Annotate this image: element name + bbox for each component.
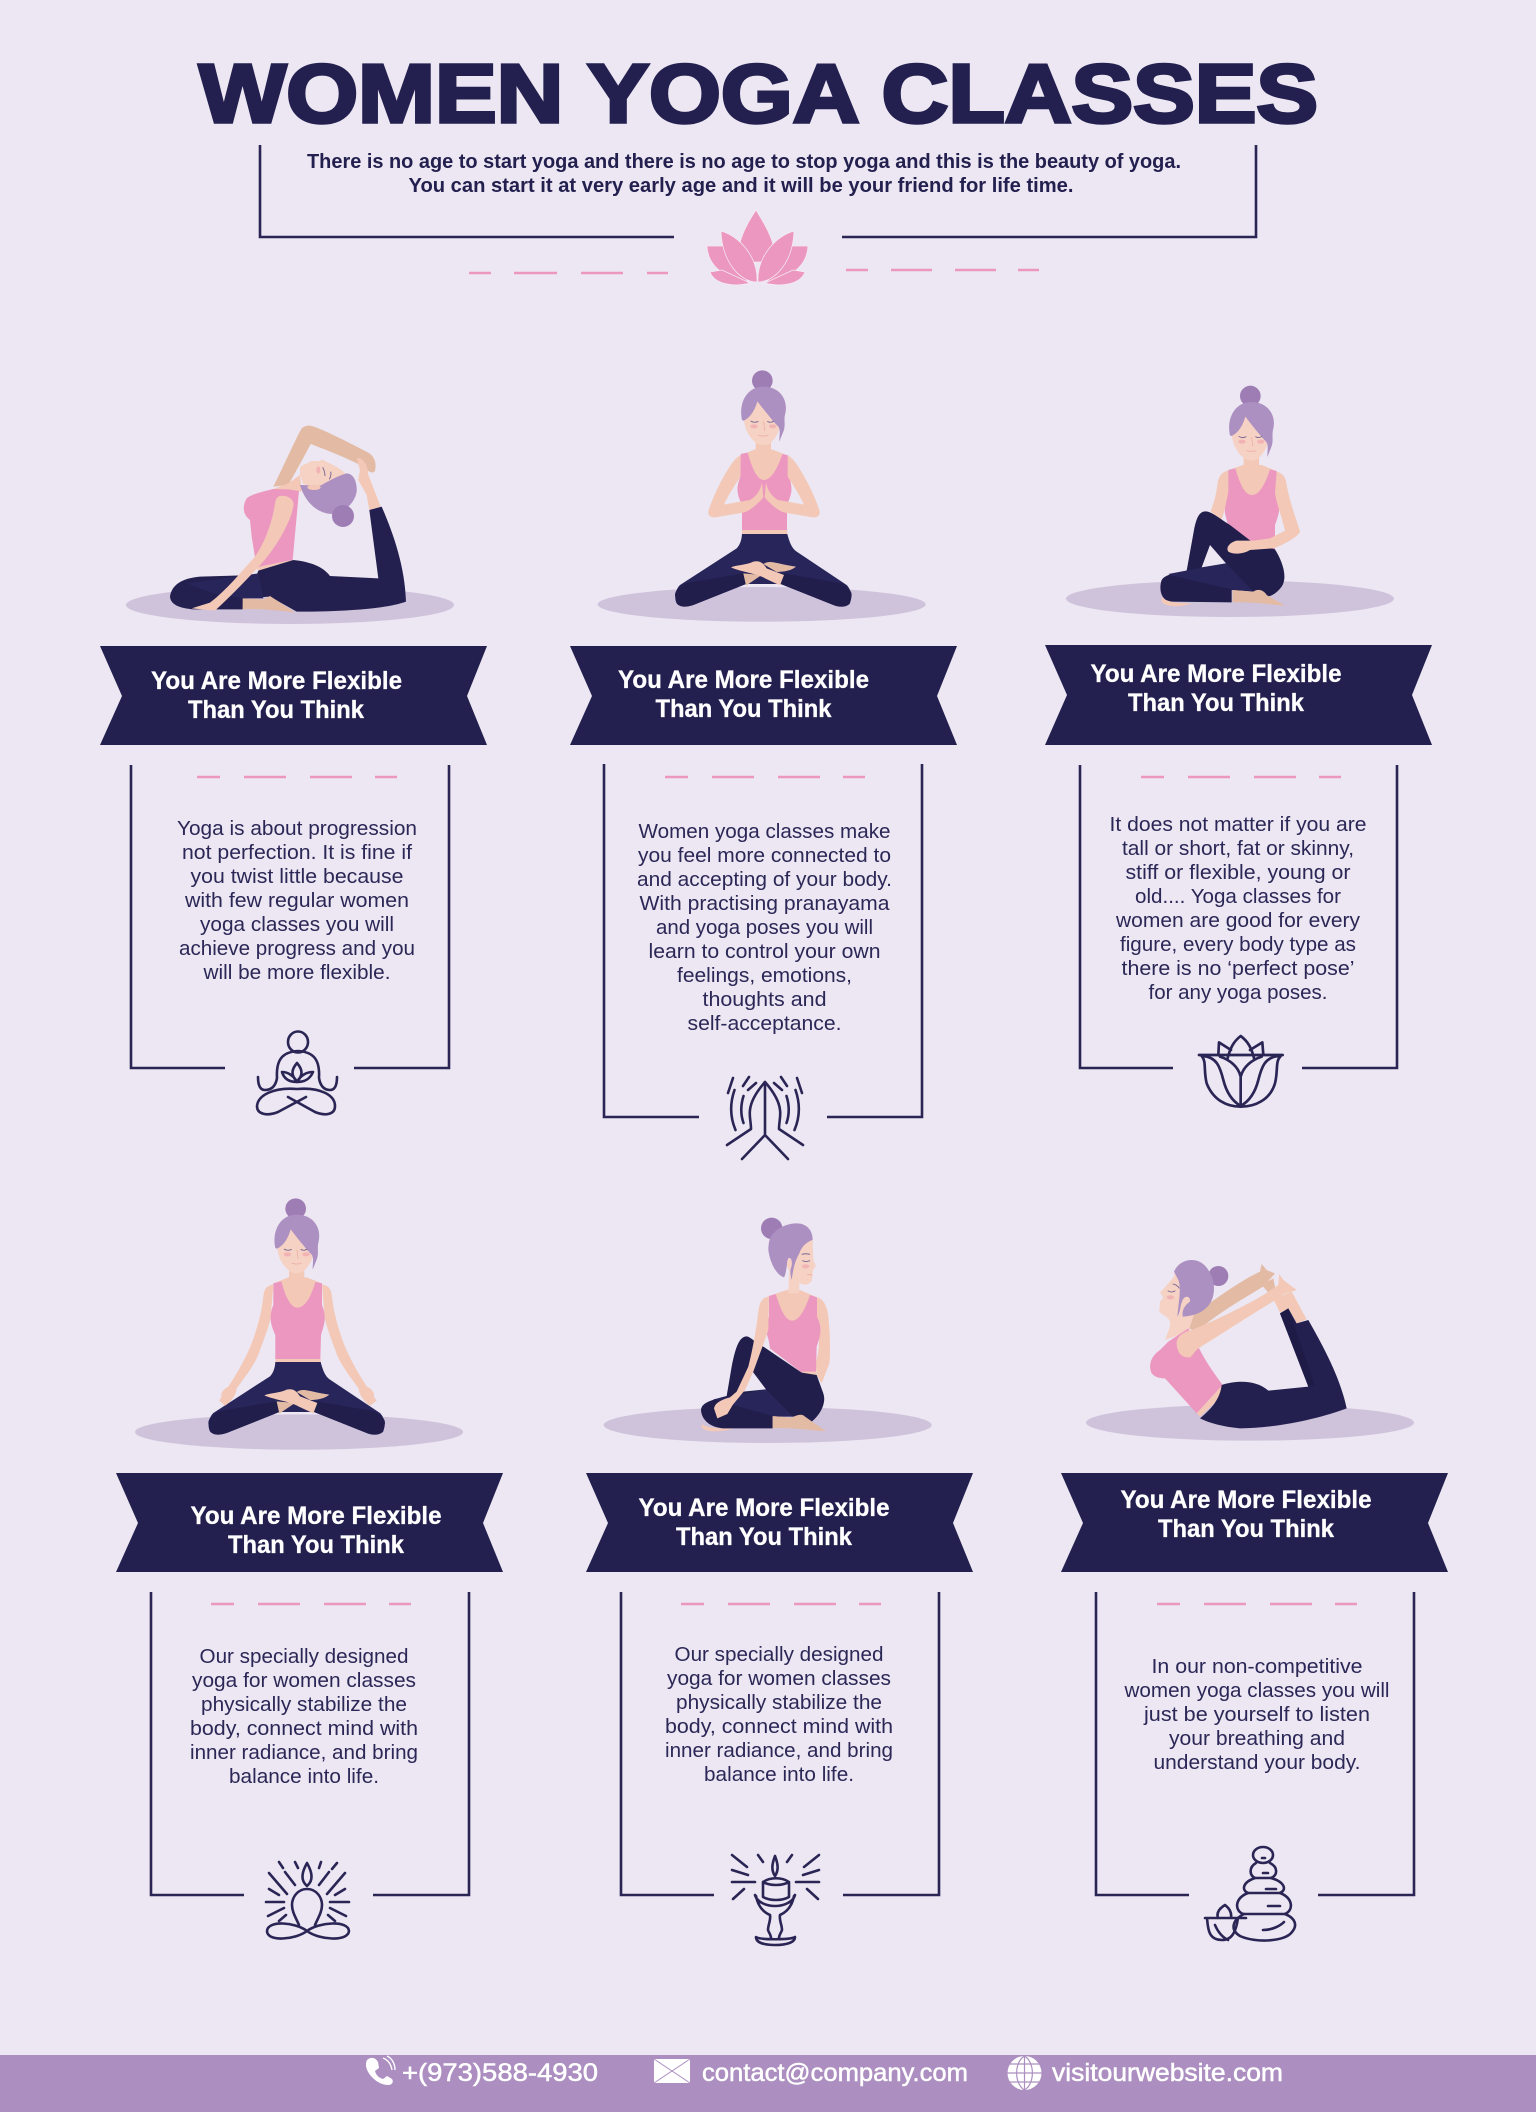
icon: radiant meditation — [266, 1862, 349, 1939]
body text: for any yoga poses. — [1148, 981, 1328, 1004]
decorative pink dashes — [1141, 776, 1341, 778]
icon: stacked stones with lotus — [1205, 1847, 1295, 1941]
figure: seated twist, hand on knee — [1066, 386, 1394, 617]
body text: physically stabilize the — [201, 1693, 407, 1716]
body text: yoga for women classes — [192, 1669, 416, 1692]
body text: not perfection. It is fine if — [182, 841, 412, 864]
decorative pink dashes right — [846, 269, 1039, 271]
banner — [116, 1473, 503, 1572]
text frame — [1080, 765, 1397, 1068]
banner: Than You Think — [1128, 689, 1304, 717]
banner: Than You Think — [1158, 1515, 1334, 1543]
body text: achieve progress and you — [179, 937, 415, 960]
text frame — [621, 1592, 939, 1895]
header intro text: There is no age to start yoga and there is no age to stop yoga and this is the beauty of yoga. — [307, 150, 1181, 173]
title: WOMEN YOGA CLASSES — [199, 47, 1318, 140]
text frame — [1096, 1592, 1414, 1895]
header intro text — [307, 150, 1181, 197]
body text: Yoga is about progression — [177, 817, 417, 840]
body text: thoughts and — [702, 988, 826, 1011]
decorative pink dashes — [681, 1603, 881, 1605]
body text: there is no ‘perfect pose’ — [1122, 957, 1354, 980]
icon: meditating figure with lotus — [257, 1032, 337, 1114]
banner: Than You Think — [188, 696, 364, 724]
banner: Than You Think — [656, 695, 832, 723]
panel: pose 1 — [100, 426, 487, 1114]
body text: stiff or flexible, young or — [1126, 861, 1351, 884]
header intro text: You can start it at very early age and it will be your friend for life time. — [408, 174, 1074, 197]
panel: pose 4 — [116, 1198, 503, 1939]
banner: You Are More Flexible — [1090, 660, 1342, 688]
banner: You Are More Flexible — [151, 667, 402, 695]
banner: You Are More Flexible — [1120, 1486, 1372, 1514]
body text: understand your body. — [1154, 1751, 1360, 1774]
text frame — [604, 764, 922, 1117]
text frame — [131, 765, 449, 1068]
body text — [177, 817, 417, 984]
decorative pink dashes — [665, 776, 865, 778]
body text: balance into life. — [229, 1765, 379, 1788]
body text: with few regular women — [184, 889, 409, 912]
body text: and accepting of your body. — [637, 868, 892, 891]
decorative pink dashes — [211, 1603, 411, 1605]
icon: praying hands — [727, 1077, 803, 1159]
body text: you feel more connected to — [638, 844, 891, 867]
banner — [1061, 1473, 1448, 1572]
body text: old.... Yoga classes for — [1135, 885, 1341, 908]
banner: Than You Think — [228, 1531, 404, 1559]
icon: envelope — [654, 2059, 690, 2083]
banner: You Are More Flexible — [190, 1502, 442, 1530]
body text: With practising pranayama — [640, 892, 890, 915]
banner — [570, 646, 957, 745]
body text: balance into life. — [704, 1763, 854, 1786]
icon: globe — [1008, 2056, 1042, 2090]
body text: physically stabilize the — [676, 1691, 882, 1714]
body text — [1110, 813, 1366, 1004]
figure: lotus pose, arms down — [135, 1198, 463, 1450]
decorative pink dashes — [1157, 1603, 1357, 1605]
body text: just be yourself to listen — [1143, 1703, 1370, 1726]
phone number: +(973)588-4930 — [402, 2059, 598, 2087]
panel: pose 6 — [1061, 1260, 1448, 1941]
figure: bow pose — [1086, 1260, 1414, 1441]
figure: king pigeon pose — [126, 426, 454, 624]
body text: yoga for women classes — [667, 1667, 891, 1690]
banner: You Are More Flexible — [618, 666, 869, 694]
body text: inner radiance, and bring — [665, 1739, 893, 1762]
body text: feelings, emotions, — [677, 964, 852, 987]
body text: tall or short, fat or skinny, — [1122, 837, 1354, 860]
body text — [637, 820, 892, 1035]
body text: learn to control your own — [648, 940, 880, 963]
icon: pink lotus — [707, 210, 808, 285]
banner — [1045, 645, 1432, 745]
panel: pose 3 — [1045, 386, 1432, 1107]
panel: pose 2 — [570, 370, 957, 1159]
figure: lotus pose with praying hands — [598, 370, 926, 622]
text frame — [151, 1592, 469, 1895]
body text: yoga classes you will — [200, 913, 394, 936]
body text: Our specially designed — [674, 1643, 884, 1666]
body text: you twist little because — [190, 865, 404, 888]
body text: your breathing and — [1169, 1727, 1345, 1750]
body text — [665, 1643, 893, 1786]
body text: body, connect mind with — [190, 1717, 418, 1740]
body text: will be more flexible. — [202, 961, 390, 984]
icon: lotus outline — [1199, 1036, 1283, 1107]
body text: self-acceptance. — [688, 1012, 842, 1035]
decorative pink dashes — [197, 776, 397, 778]
body text: body, connect mind with — [665, 1715, 893, 1738]
body text — [1123, 1655, 1390, 1774]
body text: inner radiance, and bring — [190, 1741, 418, 1764]
body text: women yoga classes you will — [1123, 1679, 1390, 1702]
email address: contact@company.com — [702, 2059, 968, 2087]
panel: pose 5 — [586, 1218, 973, 1945]
footer contact bar — [0, 2055, 1536, 2112]
icon: phone — [366, 2056, 395, 2085]
body text: Our specially designed — [200, 1645, 408, 1668]
website: visitourwebsite.com — [1052, 2059, 1283, 2087]
body text: figure, every body type as — [1120, 933, 1356, 956]
banner — [100, 646, 487, 745]
banner — [586, 1473, 973, 1572]
header bracket — [260, 145, 1256, 237]
banner: You Are More Flexible — [638, 1494, 890, 1522]
body text: and yoga poses you will — [656, 916, 873, 939]
body text: It does not matter if you are — [1110, 813, 1366, 836]
body text: women are good for every — [1115, 909, 1361, 932]
body text: In our non-competitive — [1152, 1655, 1362, 1678]
body text — [190, 1645, 418, 1788]
icon: candle — [732, 1855, 819, 1945]
figure: seated twist, looking sideways — [604, 1218, 932, 1443]
decorative pink dashes left — [469, 272, 668, 274]
body text: Women yoga classes make — [638, 820, 890, 843]
banner: Than You Think — [676, 1523, 852, 1551]
